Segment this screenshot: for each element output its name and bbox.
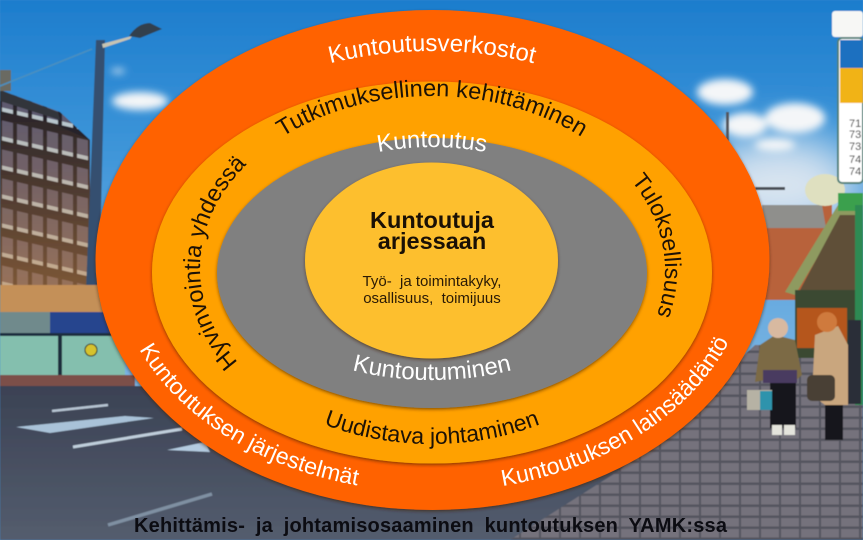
person: olive coat <box>747 318 802 435</box>
barrier fence <box>0 285 135 388</box>
ring: Kuntoutusverkostot <box>96 10 770 510</box>
text: Työ- ja toimintakyky, osallisuus, toimijuus: Työ- ja toimintakyky, <box>363 273 501 290</box>
bus stop sign: 73 <box>849 141 861 153</box>
clouds <box>111 69 825 151</box>
title: bottom caption: Kehittämis- ja johtamisosaaminen kuntoutuksen YAMK:ssa <box>134 515 728 537</box>
bus stop sign <box>832 11 863 183</box>
bus shelter <box>785 193 863 405</box>
label: Tuloksellisuus: Tuloksellisuus <box>634 172 682 318</box>
bus stop sign: 74 <box>849 166 861 178</box>
right distant buildings <box>726 112 845 300</box>
label: Tutkimuksellinen kehittäminen: Tutkimuksellinen kehittäminen <box>274 80 586 136</box>
bus stop sign: 71 <box>849 118 861 130</box>
heading: Kuntoutuja arjessaan: Kuntoutuja <box>370 207 495 233</box>
label: Uudistava johtaminen: Uudistava johtaminen <box>326 410 539 449</box>
label: Kuntoutuminen: Kuntoutuminen <box>354 354 510 380</box>
diagram: concentric ellipses <box>94 9 772 514</box>
ring: Tutkimuksellinen kehittäminen <box>152 82 712 464</box>
core: Kuntoutuja arjessaan <box>305 162 558 358</box>
left building <box>0 70 90 320</box>
ring: Kuntoutus <box>217 138 647 408</box>
label: Kuntoutusverkostot: Kuntoutusverkostot <box>328 36 536 64</box>
bus stop sign: 73 <box>849 129 861 141</box>
street lamp <box>0 23 162 340</box>
label: Kuntoutuksen järjestelmät: Kuntoutuksen järjestelmät <box>140 342 360 486</box>
pavement <box>510 345 863 540</box>
label: Hyvinvointia yhdessä: Hyvinvointia yhdessä <box>183 156 247 372</box>
text: Työ- ja toimintakyky, osallisuus, toimijuus: osallisuus, toimijuus <box>363 290 501 307</box>
label: Kuntoutuksen lainsäädäntö: Kuntoutuksen lainsäädäntö <box>502 336 727 486</box>
person: beige coat <box>807 312 861 440</box>
road <box>0 386 640 540</box>
bus stop sign: 74 <box>849 154 861 166</box>
label: Kuntoutus: Kuntoutus <box>378 132 486 152</box>
heading: Kuntoutuja arjessaan: arjessaan <box>378 228 486 254</box>
